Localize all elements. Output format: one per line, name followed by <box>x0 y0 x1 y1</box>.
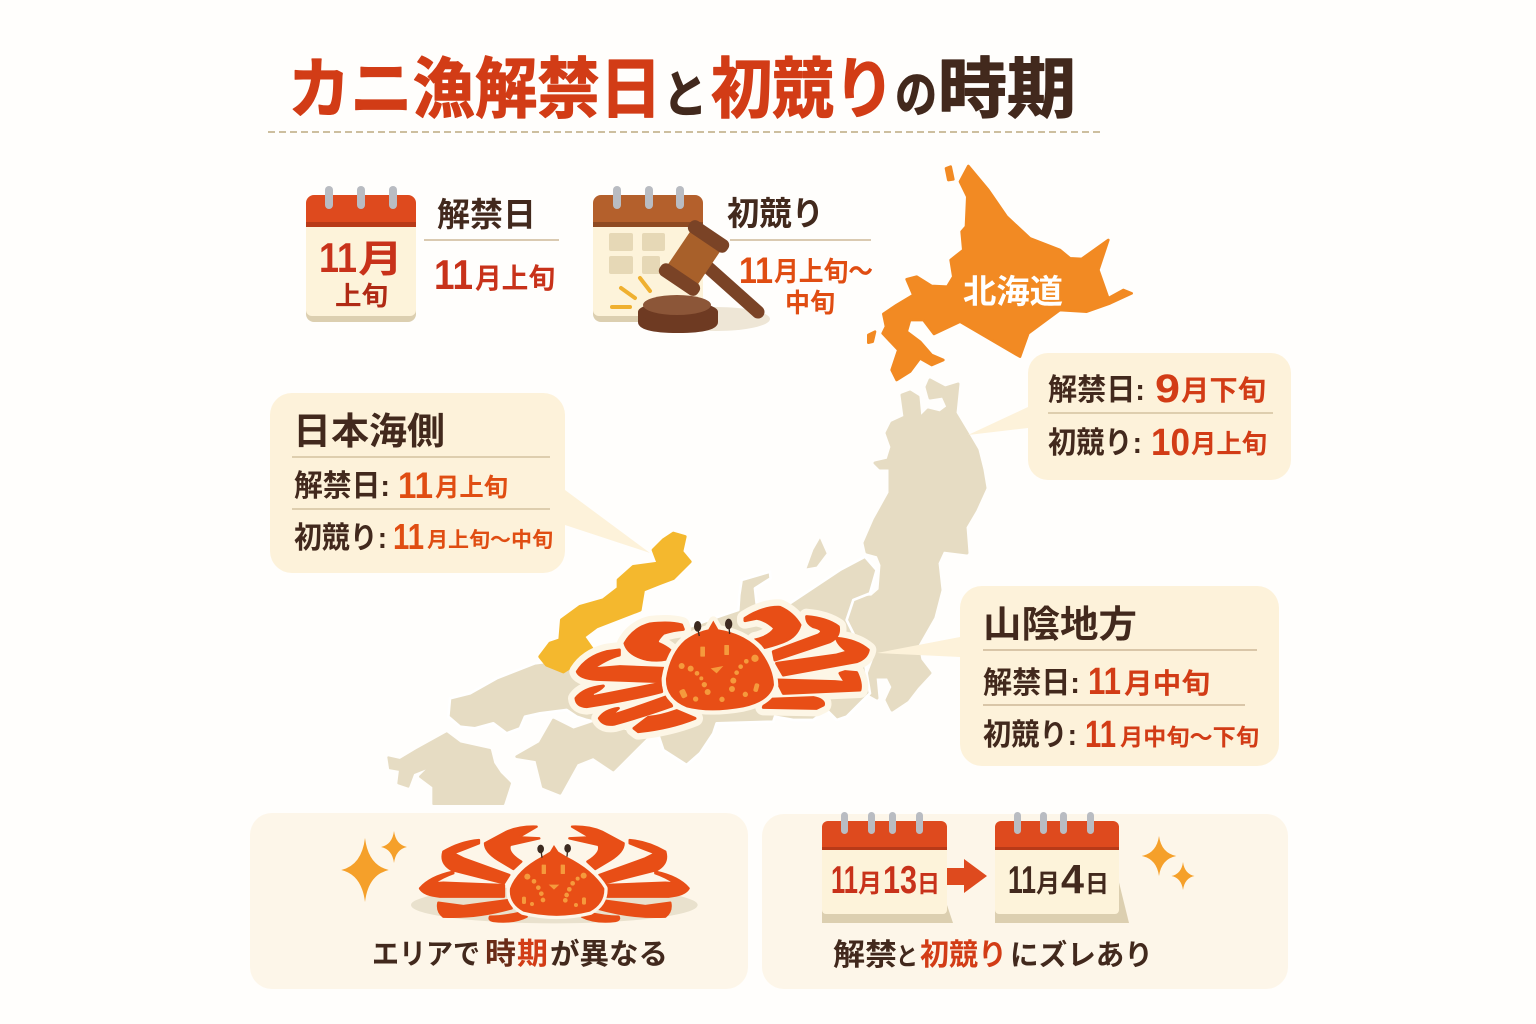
icon: main crab <box>576 607 868 732</box>
caption: date gap: 初競り <box>920 939 1007 972</box>
icon: calendar November 4: 4 <box>1061 856 1084 902</box>
calendar icon: ban-lift date <box>306 186 416 322</box>
callout: San'in region: 解禁日: <box>983 667 1080 700</box>
crab shell markings <box>679 645 760 702</box>
callout: San'in region: 山陰地方 <box>983 604 1137 645</box>
Kyushu <box>388 733 510 804</box>
callout: Sea of Japan side: 月上旬 <box>435 474 508 502</box>
callout: Hokkaido <box>968 353 1291 480</box>
callout: San'in region: 11 <box>1085 714 1116 756</box>
crab limbs <box>420 827 689 922</box>
title <box>288 52 1076 126</box>
text block: first auction: 中旬 <box>785 288 835 318</box>
callout: Sea of Japan side: 初競り: <box>294 522 387 555</box>
callout: Sea of Japan side: 11 <box>398 465 433 506</box>
icon: calendar November 13: 月 <box>858 870 882 898</box>
callout: San'in region: 初競り: <box>983 719 1077 752</box>
callout: Hokkaido: 月上旬 <box>1191 429 1267 459</box>
title: の <box>895 67 937 123</box>
caption: date gap: にズレあり <box>1010 938 1153 972</box>
callout: Sea of Japan side: 日本海側 <box>293 411 445 452</box>
calendar icon: ban-lift date: 11 <box>319 234 357 281</box>
icon: calendar November 13 <box>822 812 953 923</box>
callout: Sea of Japan side: 月上旬～中旬 <box>427 529 553 552</box>
icon: calendar November 4: 11 <box>1008 859 1036 902</box>
caption: area difference: が異なる <box>550 937 668 971</box>
callout: San'in region: 11 <box>1088 661 1121 703</box>
icon: sparkles left <box>341 831 407 902</box>
callout: San'in region <box>877 586 1279 766</box>
Honshu east and Tohoku <box>845 380 985 710</box>
caption: area difference <box>372 937 668 971</box>
caption: area difference: 時 <box>485 938 516 971</box>
icon: gavel <box>638 218 758 333</box>
icon: calendar November 13: 11 <box>831 859 858 902</box>
central and western Honshu <box>448 557 877 765</box>
text block: ban-lift date <box>424 196 559 298</box>
callout: San'in region: 月中旬 <box>1124 668 1210 699</box>
western regions of Japan <box>388 533 877 804</box>
text block: first auction: 月上旬～ <box>774 257 873 287</box>
text block: ban-lift date: 月上旬 <box>475 263 555 294</box>
icon: arrow <box>947 859 987 893</box>
callout: Hokkaido: 解禁日: <box>1048 374 1145 407</box>
crab eyes <box>694 619 732 636</box>
Hokkaido label: 北海道 <box>963 273 1063 310</box>
map of Japan <box>388 166 1132 804</box>
caption: area difference: 期 <box>517 938 548 971</box>
text block: first auction <box>727 195 873 318</box>
caption: date gap: 解禁 <box>833 939 897 972</box>
icon: calendar November 13: 13 <box>883 859 917 902</box>
title: 初競り <box>711 52 895 126</box>
icon: calendar November 4: 日 <box>1085 871 1109 898</box>
icon: calendar November 4: 月 <box>1036 870 1060 898</box>
callout: Sea of Japan side: 解禁日: <box>294 470 390 503</box>
callout: San'in region: 月中旬～下旬 <box>1120 724 1259 750</box>
calendar icon: ban-lift date: 月 <box>358 239 403 281</box>
Sado island <box>807 538 827 568</box>
Sea of Japan side highlight <box>540 533 690 672</box>
calendar and gavel icon: first auction <box>593 186 770 333</box>
crab body <box>666 621 774 710</box>
caption: date gap: と <box>896 943 918 971</box>
Shikoku <box>517 720 647 793</box>
icon: calendar November 4 <box>995 812 1129 923</box>
callout: Hokkaido: 初競り: <box>1048 427 1142 460</box>
icon: sparkles right <box>1142 836 1195 890</box>
panel: area difference <box>250 813 748 989</box>
crab legs and claws <box>576 607 868 732</box>
text block: ban-lift date: 11 <box>434 251 473 298</box>
crab markings <box>522 865 587 907</box>
crab body <box>510 845 604 916</box>
title: 時期 <box>938 52 1076 126</box>
text block: ban-lift date: 解禁日 <box>437 196 536 233</box>
caption: area difference: エリアで <box>372 939 480 971</box>
callout: Sea of Japan side <box>270 393 650 573</box>
Hokkaido highlight <box>868 166 1132 380</box>
icon: bottom crab <box>411 827 698 923</box>
callout: Hokkaido: 月下旬 <box>1181 375 1266 406</box>
text block: first auction: 初競り <box>727 195 824 232</box>
text block: first auction: 11 <box>739 250 773 291</box>
callout: Hokkaido: 9 <box>1155 367 1180 411</box>
crab outline layer <box>576 607 868 732</box>
caption: date gap <box>833 938 1153 972</box>
callout: Sea of Japan side: 11 <box>393 516 424 557</box>
callout: Hokkaido: 10 <box>1151 422 1190 464</box>
title: カニ漁解禁日 <box>288 52 662 126</box>
icon: calendar November 13: 日 <box>917 871 940 898</box>
crab eyes <box>537 844 571 858</box>
calendar icon: ban-lift date: 上旬 <box>335 281 388 311</box>
panel: date gap <box>762 812 1288 989</box>
title: と <box>663 67 707 123</box>
